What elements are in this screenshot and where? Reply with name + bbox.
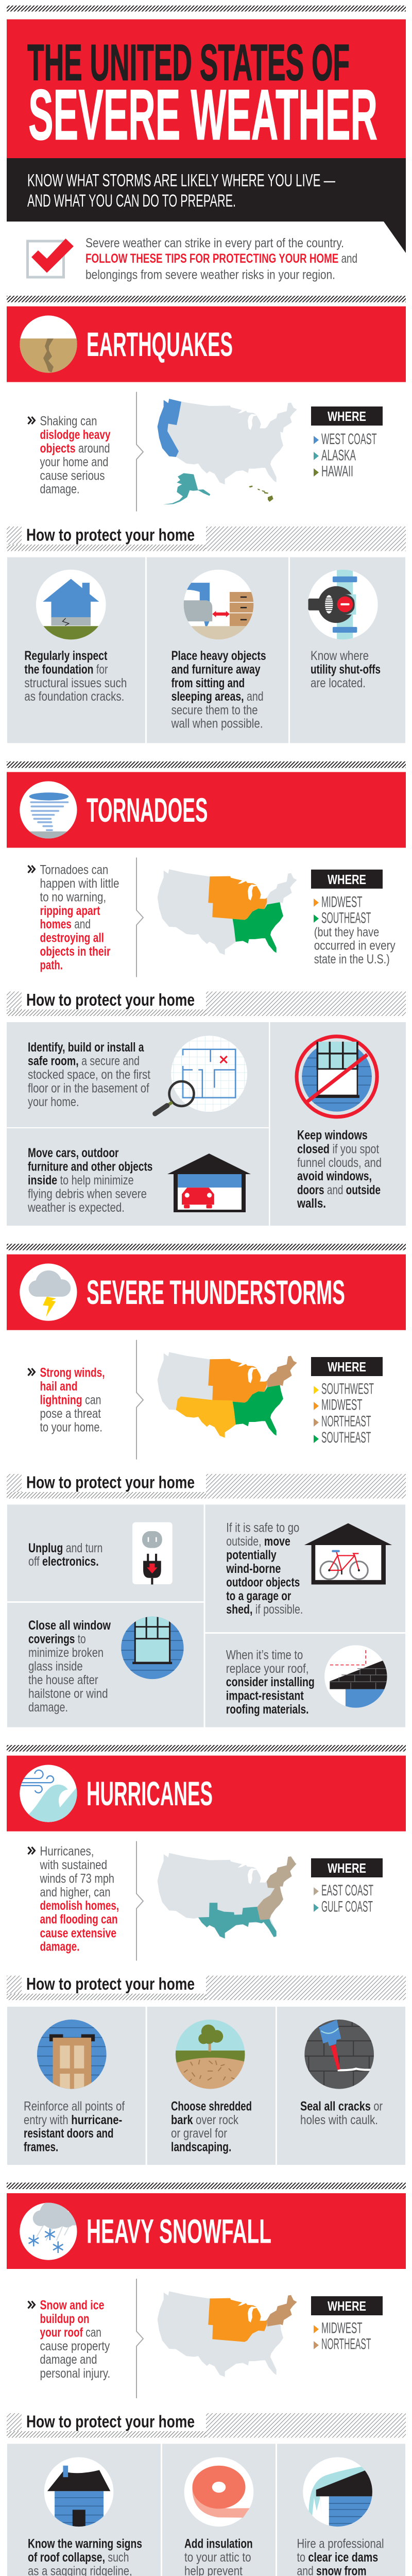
where box: earthquakes: HAWAII [321,463,353,480]
hurricanes intro text: cause extensive [40,1926,116,1941]
icon: tornado [20,781,77,839]
intro text [85,236,357,282]
panel text [226,1521,303,1617]
panel text: Unplug and turn [28,1541,102,1555]
hurricanes intro text: Hurricanes, [40,1844,94,1859]
panel text [171,2099,252,2155]
panel text: or gravel for [171,2126,227,2141]
where box: hurricanes: WHERE [328,1860,366,1876]
panel text: damage. [28,1700,68,1715]
icon: wave and wind [20,1765,78,1823]
panel: shredded bark [147,2007,276,2165]
heading strip: how to protect your home (earthquakes) [7,526,406,551]
panel text [184,2536,253,2576]
panel text: Reinforce all points of [24,2099,125,2113]
panel text: Keep windows [297,1128,368,1143]
where box: tornadoes [311,870,396,967]
icon: shed with bicycle [304,1523,392,1585]
panel text [24,2099,125,2155]
heading strip: how to protect your home (thunderstorms) [7,1473,406,1498]
header panel: title and subtitle [7,20,406,253]
map: tornadoes [158,869,297,955]
panel: roof collapse signs [7,2444,161,2576]
panel: impact-resistant roof [205,1634,405,1727]
panel: safe room [7,1022,269,1127]
tornadoes intro text [28,862,119,973]
panel text: Move cars, outdoor [28,1146,119,1160]
where box: thunderstorms: MIDWEST [321,1397,363,1414]
icon: insulation roll [184,2457,253,2527]
icon: reinforced door [34,2020,110,2090]
heading strip: how to protect your home (tornadoes) [7,991,406,1016]
section banner: severe thunderstorms [7,1255,406,1330]
panel text [297,1128,382,1211]
panel text: shed, if possible. [226,1602,303,1617]
where box: earthquakes: WHERE [328,409,366,424]
panel: add insulation [162,2444,276,2576]
icon: sagging house [44,2457,113,2528]
where box: earthquakes [311,406,383,480]
hurricanes intro text: and flooding can [40,1912,117,1927]
panel text: funnel clouds, and [297,1156,382,1170]
icon: floor plan with magnifier [155,1036,247,1114]
panel text: Regularly inspect [24,649,108,663]
panel text: coverings to [28,1632,86,1646]
subtitle [27,171,335,211]
tornadoes intro text: ripping apart [40,904,100,918]
icon: roof shingles [324,1645,390,1711]
panel text: are located. [311,676,366,690]
icon: ice dam on roof [303,2457,374,2528]
panel text: utility shut-offs [311,663,381,677]
snowfall intro text: personal injury. [40,2366,110,2381]
heading strip: how to protect your home (snowfall) [7,2412,406,2438]
subtitle: AND WHAT YOU CAN DO TO PREPARE. [27,191,236,211]
panel text: outside, move [226,1534,290,1549]
tornadoes intro text: to no warning, [40,890,106,905]
where box: snowfall [311,2296,383,2353]
tornadoes intro text: Tornadoes can [40,862,108,877]
panel: keep windows closed [270,1022,406,1226]
earthquakes intro text: your home and [40,455,108,469]
panel text [28,1541,102,1569]
panel text: to clear ice dams [297,2550,378,2565]
panel text [300,2099,383,2127]
panel: utility shut-offs [290,557,405,743]
panel text: sleeping areas, and [171,689,264,704]
where box: thunderstorms [311,1357,383,1446]
hurricanes intro text: winds of 73 mph [40,1872,114,1886]
intro text: Severe weather can strike in every part of the country. [85,236,344,250]
icon: snow cloud [20,2200,77,2260]
intro text: belongings from severe weather risks in your region. [85,268,335,282]
panel text: to your attic to [184,2550,251,2565]
where box: tornadoes: WHERE [328,872,366,887]
map: snowfall [158,2291,297,2377]
panel: unplug electronics [7,1504,204,1601]
tornadoes intro text: happen with little [40,876,119,891]
panel text [171,649,266,731]
panel text: your home. [28,1095,79,1109]
earthquakes intro text: Shaking can [40,414,97,429]
panel text: holes with caulk. [300,2113,378,2127]
earthquakes intro text: cause serious [40,469,105,483]
panel text [226,1648,315,1717]
snowfall intro text: damage and [40,2352,97,2367]
panel text: minimize broken [28,1646,104,1660]
panel text: off electronics. [28,1554,99,1569]
thunderstorms intro text: hail and [40,1379,77,1394]
panel text [311,649,381,690]
panel text: Hire a professional [297,2536,384,2551]
panel: seal cracks [277,2007,405,2165]
where box: earthquakes: ALASKA [321,447,356,464]
panel text: the house after [28,1673,98,1687]
icon: ground crack [20,315,77,373]
heading: TORNADOES [87,791,208,829]
earthquakes intro text: dislodge heavy [40,428,111,442]
panel text: floor or in the basement of [28,1081,149,1095]
snowfall intro text: Snow and ice [40,2298,105,2313]
panel text: bark over rock [171,2113,238,2127]
icon: storm cloud [20,1264,77,1321]
panel text [27,2536,142,2576]
panel text: roofing materials. [226,1702,309,1717]
where box: hurricanes [311,1858,383,1916]
panel text: glass inside [28,1659,83,1673]
where box: snowfall: MIDWEST [321,2320,363,2337]
heading strip: how to protect your home (thunderstorms): How to protect your home [26,1473,195,1492]
panel text: stocked space, on the first [28,1067,150,1082]
icon: caulk on bricks [302,2020,376,2089]
thunderstorms intro text [28,1365,105,1435]
heading strip: how to protect your home (snowfall): How to protect your home [26,2412,195,2432]
icon: tree and bark [175,2019,246,2091]
panel text: Close all window [28,1618,111,1633]
speech bubble panel [7,158,406,253]
earthquakes intro text [28,414,111,497]
snowfall intro text [28,2298,110,2381]
panel text: wind-borne [226,1562,281,1576]
panel text: from sitting and [171,676,245,690]
panel: move heavy furniture [147,557,288,743]
panel text: avoid windows, [297,1169,372,1183]
heading strip: how to protect your home (hurricanes): How to protect your home [26,1975,195,1994]
snowfall intro text: buildup on [40,2312,90,2326]
tornadoes intro text: path. [40,958,63,973]
where box: tornadoes: occurred in every [314,938,396,953]
heading: HURRICANES [87,1774,213,1812]
where box: thunderstorms: WHERE [328,1359,366,1375]
panel text: walls. [297,1196,326,1211]
panel text: impact-resistant [226,1689,304,1703]
tornadoes intro text: destroying all [40,931,104,945]
intro text: FOLLOW THESE TIPS FOR PROTECTING YOUR HOME and [85,251,357,266]
section banner: tornadoes [7,772,406,848]
panel text: flying debris when severe [28,1187,147,1201]
where box: tornadoes: (but they have [314,925,379,939]
section banner: heavy snowfall [7,2193,406,2269]
heading strip: how to protect your home (hurricanes) [7,1975,406,2000]
panel text: inside to help minimize [28,1173,134,1188]
panel text: Know where [311,649,369,663]
map: hurricanes [158,1853,297,1939]
earthquakes intro text: damage. [40,482,79,497]
panel text: to a garage or [226,1589,291,1603]
panel text: wall when possible. [171,716,263,731]
tornadoes intro text: objects in their [40,944,111,959]
hurricanes intro text: demolish homes, [40,1899,119,1913]
heading strip: how to protect your home (tornadoes): How to protect your home [26,991,195,1010]
panel text: doors and outside [297,1183,381,1197]
panel text: structural issues such [24,676,127,690]
panel text: replace your roof, [226,1662,309,1676]
thunderstorms intro text: pose a threat [40,1406,101,1421]
panel: close window coverings [7,1603,204,1727]
hurricanes intro text: with sustained [40,1858,107,1872]
hurricanes intro text [28,1844,119,1954]
icon: checkbox [28,239,74,277]
hurricanes intro text: damage. [40,1940,79,1954]
panel text: frames. [24,2140,58,2155]
panel text: and furniture away [171,663,261,677]
earthquakes intro text: objects around [40,442,110,456]
thunderstorms intro text: to your home. [40,1420,102,1435]
heading: HEAVY SNOWFALL [87,2212,271,2250]
hurricanes intro text: and higher, can [40,1885,110,1900]
icon: utility valve [308,568,378,642]
tornadoes intro text: homes and [40,917,91,931]
panel text [297,2536,384,2576]
panel text: Add insulation [184,2536,253,2551]
panel text: If it is safe to go [226,1521,299,1535]
where box: snowfall: WHERE [328,2298,366,2314]
panel text [28,1618,111,1715]
panel text: the foundation for [24,663,108,677]
panel text: Identify, build or install a [28,1040,144,1055]
panel: move cars inside [7,1128,269,1226]
panel text [28,1040,150,1109]
icon: outlet and plug [132,1522,173,1585]
section banner: hurricanes [7,1756,406,1832]
icon: no windows [297,1037,377,1117]
panel text [27,1146,152,1215]
map: earthquakes [158,399,297,504]
panel text: closed if you spot [297,1142,379,1156]
panel text: weather is expected. [27,1200,125,1215]
panel text: furniture and other objects [28,1159,152,1174]
panel: reinforce entry points [7,2007,146,2165]
thunderstorms intro text: Strong winds, [40,1365,105,1380]
snowfall intro text: your roof can [40,2326,101,2340]
heading strip: how to protect your home (earthquakes): How to protect your home [26,526,195,545]
panel text: secure them to the [171,703,258,717]
panel: inspect foundation [7,557,145,743]
panel text: of roof collapse, such [28,2550,129,2565]
panel text: landscaping. [171,2140,231,2155]
heading: EARTHQUAKES [87,325,233,363]
panel text: Choose shredded [171,2099,252,2113]
panel text: resistant doors and [24,2126,113,2141]
panel text: safe room, a secure and [28,1054,140,1068]
thunderstorms intro text: lightning can [40,1393,101,1408]
panel: move wind-borne objects [205,1504,405,1632]
panel text: hailstone or wind [28,1686,108,1701]
panel text: consider installing [226,1675,315,1689]
panel text: Seal all cracks or [300,2099,383,2113]
panel text: entry with hurricane- [24,2113,122,2127]
icon: house with cracked foundation [36,570,106,639]
panel text: Know the warning signs [28,2536,142,2551]
panel text: When it’s time to [226,1648,303,1662]
panel text: Place heavy objects [171,649,266,663]
where box: tornadoes: MIDWEST [321,893,363,911]
panel: clear ice dams [277,2444,405,2576]
where box: tornadoes: state in the U.S.) [314,952,390,967]
snowfall intro text: cause property [40,2339,110,2353]
panel text: as foundation cracks. [24,689,124,704]
section banner: earthquakes [7,307,406,382]
panel text: outdoor objects [226,1575,300,1590]
icon: furniture and bed [183,570,256,642]
icon: window [118,1616,186,1679]
panel text [24,649,127,704]
panel text: potentially [226,1548,277,1562]
icon: garage with car [167,1154,251,1212]
map: thunderstorms [158,1352,297,1438]
